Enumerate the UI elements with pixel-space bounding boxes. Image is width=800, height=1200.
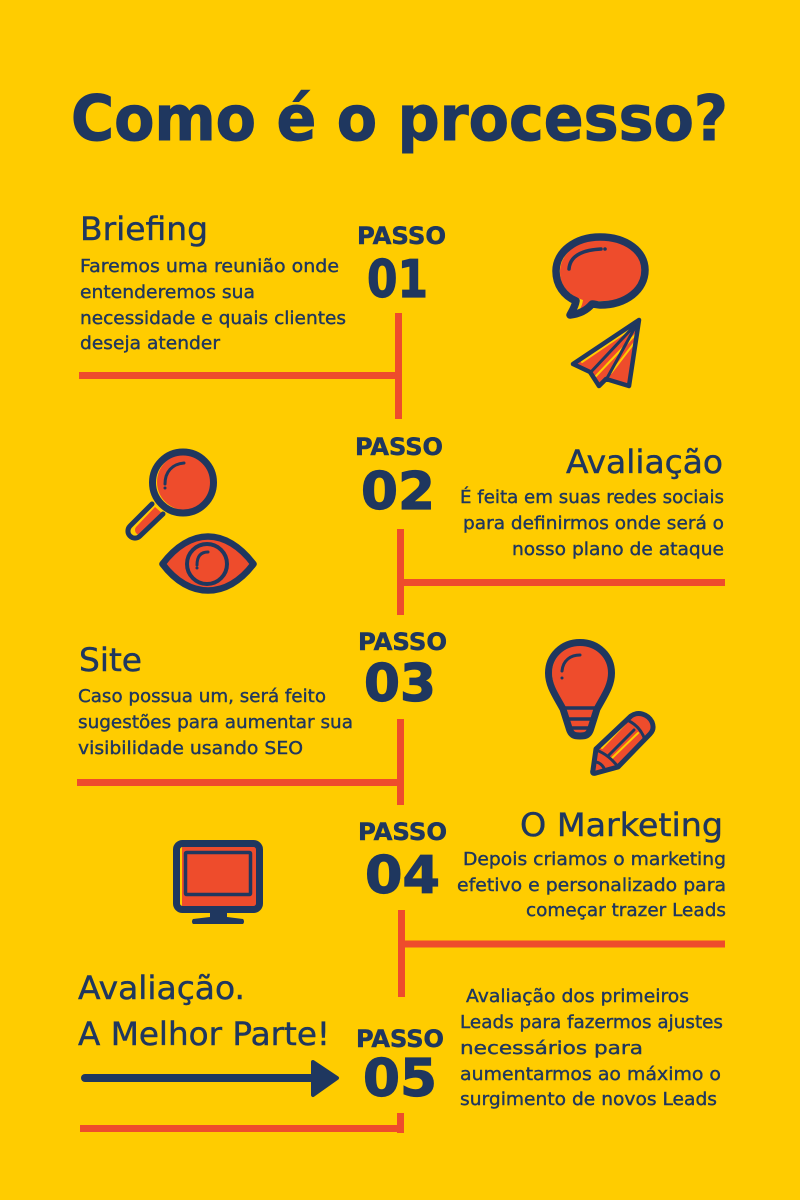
step 4 label: 04 [365,846,440,906]
step 1 description: deseja atender [80,333,221,354]
step 3 label: 03 [364,654,436,714]
step 1 label [357,222,446,310]
step 2 connector [400,529,725,615]
step 3 description: Caso possua um, será feito [78,686,326,707]
step 1 connector [79,313,398,419]
icon: pencil [593,714,653,775]
step 2 description: para definirmos onde será o [463,513,724,534]
step 5 description: Leads para fazermos ajustes [460,1012,723,1033]
step 2 label [355,433,443,522]
step 5 description: aumentarmos ao máximo o [460,1064,721,1085]
step 3 label [358,628,447,714]
step 1 label: 01 [367,250,428,310]
step 3 text block [78,641,353,759]
step 4 description: começar trazer Leads [526,900,726,921]
step 3 description [78,686,353,759]
step 1 text block [80,210,346,354]
step 5 description [460,986,723,1110]
step 2 text block [460,443,724,560]
step 4 heading: O Marketing [520,806,723,844]
icon: computer monitor [176,844,260,924]
icon: speech bubble [556,237,645,315]
step 3 connector [77,719,400,805]
icon: magnifying glass [128,452,214,538]
step 4 description: efetivo e personalizado para [457,875,726,896]
step 4 label: PASSO [358,818,447,846]
step 4 label [358,818,447,906]
icon: paper plane [573,320,640,386]
step 1 label: PASSO [357,222,446,250]
step 2 description [460,486,724,560]
step 5 label: 05 [363,1049,437,1109]
step 2 description: É feita em suas redes sociais [460,486,724,508]
step 2 label: PASSO [355,433,443,461]
step 1 description: necessidade e quais clientes [80,308,346,329]
step 2 description: nosso plano de ataque [512,539,724,560]
step 5 description: necessários para [460,1038,643,1059]
step 5 heading: A Melhor Parte! [78,1015,330,1053]
step 2 heading: Avaliação [566,443,723,481]
step 4 description [457,849,726,921]
step 5 label [356,1025,444,1109]
step 1 description: Faremos uma reunião onde [80,256,339,277]
step 1 description [80,256,346,354]
step 1 heading: Briefing [80,210,208,248]
step 3 heading: Site [79,641,142,679]
title: Como é o processo? [71,82,728,155]
step 5 label: PASSO [356,1025,444,1053]
step 5 heading [78,969,330,1053]
step 4 description: Depois criamos o marketing [463,849,726,870]
step 5 description: Avaliação dos primeiros [466,986,689,1007]
step 5 heading: Avaliação. [78,969,245,1007]
step 4 connector [401,910,725,997]
step 5 description: surgimento de novos Leads [460,1089,717,1110]
arrow [85,1062,337,1095]
step 4 text block [457,806,726,921]
step 2 label: 02 [361,462,435,522]
step 3 label: PASSO [358,628,447,656]
step 5 connector [80,1113,404,1133]
step 3 description: sugestões para aumentar sua [78,712,353,733]
step 1 description: entenderemos sua [80,282,255,303]
icon: light bulb [548,642,612,736]
step 3 description: visibilidade usando SEO [78,738,303,759]
icon: eye [162,536,254,590]
